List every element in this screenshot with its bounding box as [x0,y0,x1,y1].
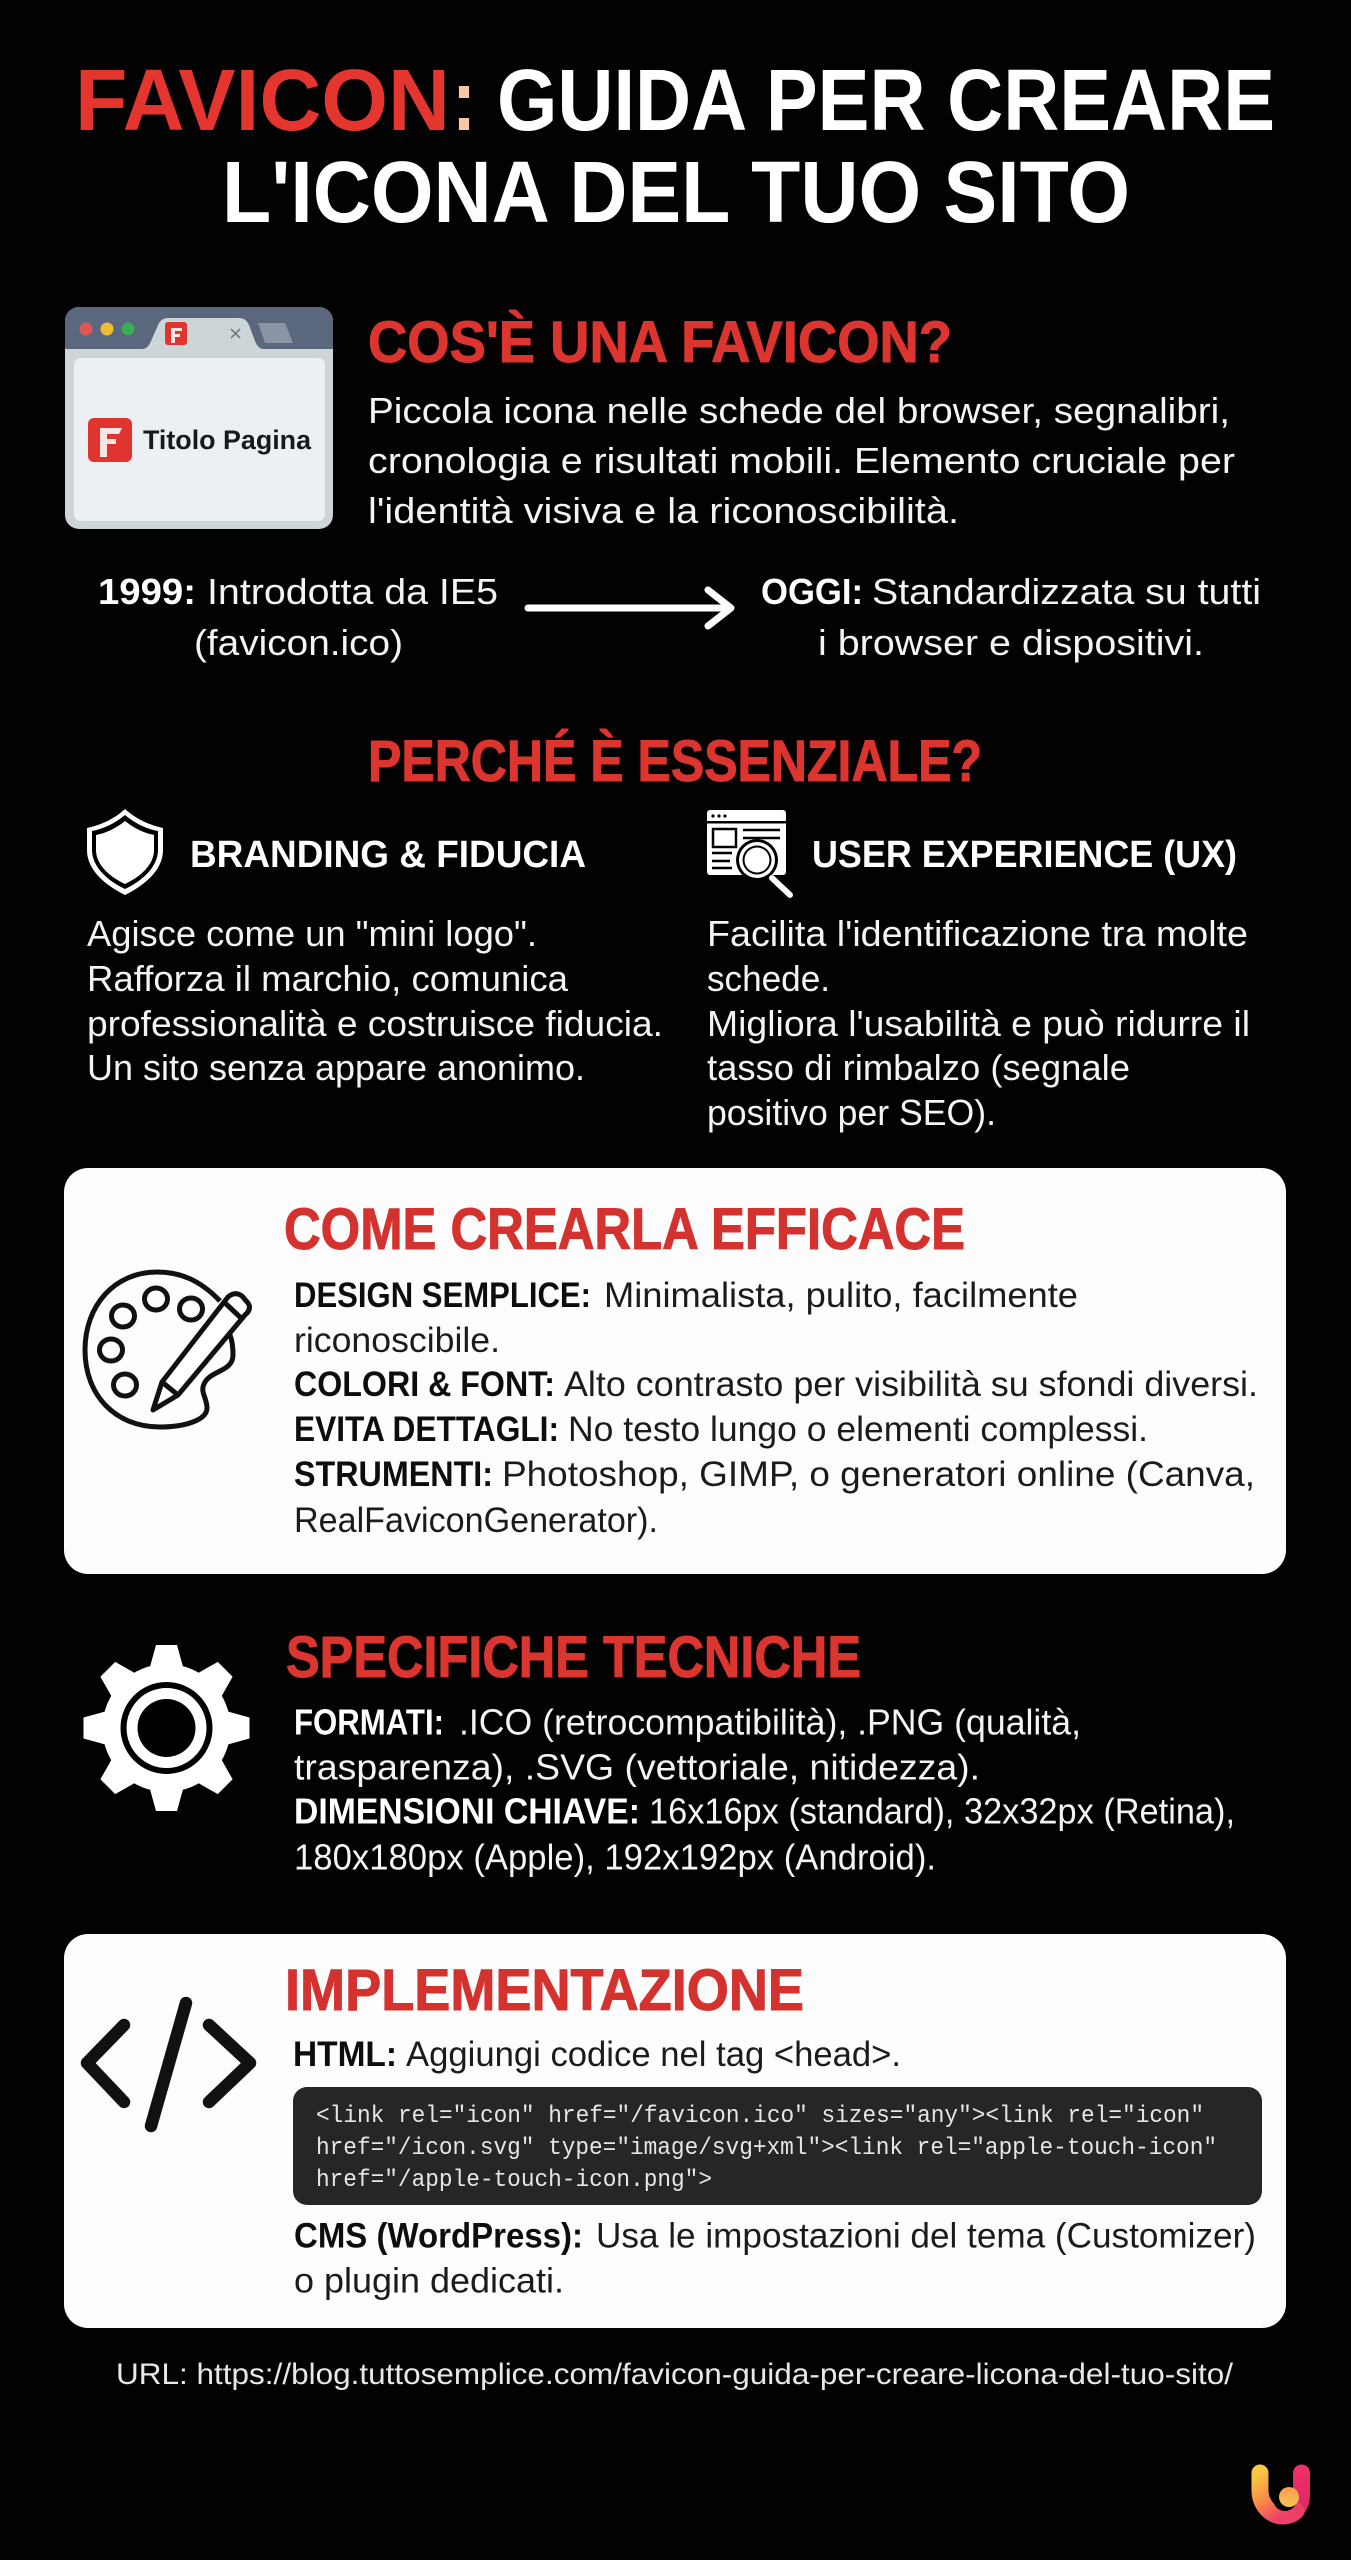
text: oggi: OGGI: [761,571,863,612]
text: come crearla: Alto contrasto per visibilità su sfondi diversi. [564,1365,1258,1404]
text: come crearla: STRUMENTI: [294,1455,493,1494]
text: branding: Rafforza il marchio, comunica [87,958,569,999]
title: FAVICON [75,52,450,149]
text: user experience [707,913,1250,1133]
heading: user experience: USER EXPERIENCE (UX) [812,834,1237,876]
title: L'ICONA DEL TUO SITO [222,144,1130,241]
text: come crearla: riconoscibile. [294,1321,500,1360]
text: definizione favicon: l'identità visiva e la riconoscibilità. [368,490,959,531]
heading: come crearla efficace: COME CREARLA EFFICACE [284,1197,965,1262]
text: cms: Usa le impostazioni del tema (Customizer) [596,2216,1256,2256]
text: come crearla [294,1276,1258,1540]
arrow: timeline [528,590,731,626]
text: cms [294,2216,1256,2300]
title [75,52,1275,241]
text: come crearla: DESIGN SEMPLICE: [294,1276,591,1315]
text: specifiche tecniche [294,1702,1235,1878]
icon: browser window with favicon [65,307,333,529]
title: GUIDA PER CREARE [497,52,1275,149]
panel: come crearla efficace [64,1168,1286,1574]
text: specifiche tecniche: .ICO (retrocompatibilità), .PNG (qualità, [459,1702,1081,1742]
code block: <link rel="icon" href="/favicon.ico" sizes="any"><link rel="icon" [316,2103,1204,2130]
text: 1999: (favicon.ico) [194,622,403,663]
text: 1999: Introdotta da IE5 [207,571,498,612]
panel: implementazione [64,1934,1286,2328]
text: specifiche tecniche: trasparenza), .SVG (vettoriale, nitidezza). [294,1746,980,1788]
text: cms: o plugin dedicati. [294,2262,564,2300]
text: cms: CMS (WordPress): [294,2216,583,2256]
text: specifiche tecniche: DIMENSIONI CHIAVE: [294,1790,640,1832]
text: definizione favicon [368,390,1235,531]
heading: cos'è una favicon: COS'È UNA FAVICON? [368,310,952,375]
text: 1999: 1999: [98,571,196,612]
text: specifiche tecniche: 180x180px (Apple), 192x192px (Android). [294,1836,936,1878]
text: user experience: positivo per SEO). [707,1092,996,1133]
text: html: HTML: [293,2035,397,2074]
text: come crearla: COLORI & FONT: [294,1365,555,1404]
text: definizione favicon: Piccola icona nelle schede del browser, segnalibri, [368,390,1230,431]
text: user experience: Migliora l'usabilità e può ridurre il [707,1003,1250,1044]
heading: implementazione: IMPLEMENTAZIONE [285,1958,804,2023]
text: user experience: schede. [707,958,830,999]
code block: href="/icon.svg" type="image/svg+xml"><link rel="apple-touch-icon" [316,2135,1217,2162]
text: come crearla: Photoshop, GIMP, o generatori online (Canva, [502,1455,1255,1494]
code block: href="/apple-touch-icon.png"> [316,2167,712,2194]
text: 1999 [98,571,498,663]
text: come crearla: Minimalista, pulito, facilmente [604,1276,1078,1315]
icon: logo [1260,2473,1302,2516]
heading: specifiche tecniche: SPECIFICHE TECNICHE [286,1625,861,1690]
icon: code brackets [87,2003,250,2126]
icon: shield [87,809,163,895]
heading: branding e fiducia: BRANDING & FIDUCIA [190,834,586,876]
text: specifiche tecniche: FORMATI: [294,1702,444,1742]
text: come crearla: EVITA DETTAGLI: [294,1410,559,1449]
text: oggi: Standardizzata su tutti [872,571,1261,612]
icon: gear [84,1645,250,1811]
code block [293,2087,1262,2205]
icon: browser with magnifier [707,810,790,895]
text: definizione favicon: cronologia e risultati mobili. Elemento cruciale per [368,440,1235,481]
text: branding: professionalità e costruisce fiducia. [87,1003,663,1044]
icon: browser window with favicon: Titolo Pagina [143,425,312,455]
text: url: URL: https://blog.tuttosemplice.com/favicon-guida-per-creare-licona-del-tuo-sito/ [116,2358,1234,2391]
text: user experience: Facilita l'identificazione tra molte [707,913,1248,954]
text: user experience: tasso di rimbalzo (segnale [707,1047,1130,1088]
text: oggi: i browser e dispositivi. [818,622,1204,663]
text: come crearla: RealFaviconGenerator). [294,1501,658,1540]
heading: perché è essenziale: PERCHÉ È ESSENZIALE? [368,729,982,794]
icon: palette and pencil [85,1272,249,1427]
text: html: Aggiungi codice nel tag <head>. [406,2035,901,2074]
text: come crearla: No testo lungo o elementi complessi. [568,1410,1148,1449]
title: : [452,52,476,149]
text: branding: Un sito senza appare anonimo. [87,1047,585,1088]
text: branding: Agisce come un "mini logo". [87,913,537,954]
text: oggi [761,571,1261,663]
text: specifiche tecniche: 16x16px (standard), 32x32px (Retina), [649,1790,1235,1832]
text: branding [87,913,663,1088]
